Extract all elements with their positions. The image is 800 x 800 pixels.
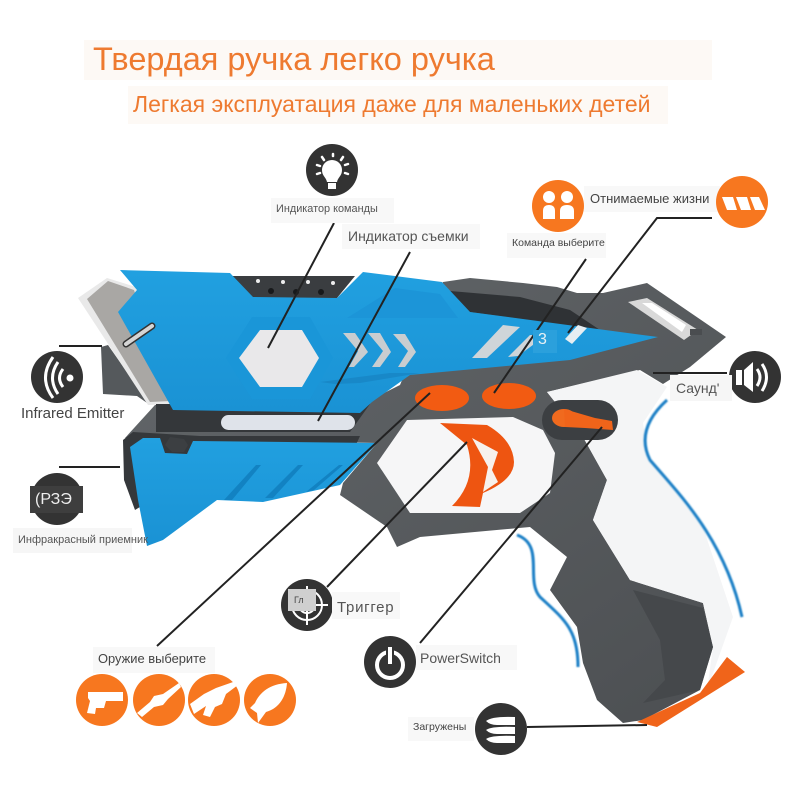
rail holes: [256, 279, 335, 285]
label: lives: Отнимаемые жизни: [590, 191, 709, 206]
icon: trigger target: Гл: [294, 595, 304, 605]
orange trigger: [440, 423, 514, 507]
label: loaded: [408, 717, 474, 741]
label: weapon select: [93, 647, 215, 673]
lower grooves: [224, 465, 343, 500]
icon: rifle: [133, 674, 185, 726]
label: sound: [670, 375, 732, 401]
label: shooting indicator: Индикатор съемки: [348, 228, 469, 244]
label: team select: Команда выберите: [512, 237, 605, 249]
display digit 3: 3: [538, 331, 547, 348]
icon: infrared receiver: [30, 473, 83, 525]
label: lives: [584, 186, 720, 212]
title: Твердая ручка легко ручка: [93, 41, 496, 77]
label: team select: [507, 233, 606, 258]
icon: infrared emitter: [31, 351, 83, 403]
icon: team indicator bulb: [306, 144, 358, 196]
gray frame: [125, 278, 726, 723]
rear dark emitter block: [101, 345, 150, 405]
shooting indicator: [221, 415, 355, 430]
icon: power: [364, 636, 416, 688]
white grip: [547, 370, 733, 690]
subtitle: Легкая эксплуатация даже для маленьких детей: [133, 91, 650, 117]
label: power switch: [416, 645, 517, 670]
label: trigger: Триггер: [337, 599, 394, 616]
label: team indicator: Индикатор команды: [276, 203, 378, 215]
icon: lives: [716, 176, 768, 228]
label: loaded: Загружены: [413, 721, 466, 733]
label: infrared emitter: Infrared Emitter: [21, 405, 124, 422]
icon: assault rifle: [188, 674, 240, 726]
label: weapon select: Оружие выберите: [98, 651, 206, 666]
icon: trigger target: [281, 579, 333, 631]
slanted stripes: [472, 325, 545, 358]
blue glow stripes: [517, 400, 742, 667]
label: power switch: PowerSwitch: [420, 650, 501, 666]
icon: pistol: [76, 674, 128, 726]
laser gun illustration: [78, 270, 745, 727]
dark front section: [123, 432, 360, 510]
rear silver plate: [78, 278, 178, 405]
display digit 3: [533, 330, 557, 353]
top rail dark: [230, 276, 355, 298]
label: shooting indicator: [342, 224, 480, 249]
icon: sound: [729, 351, 781, 403]
title: [84, 40, 712, 80]
orange magazine base: [637, 657, 745, 727]
icon: rocket: [244, 674, 296, 726]
trigger guard opening: [377, 417, 555, 513]
callout lines: [59, 218, 727, 727]
grip panel: [633, 590, 713, 703]
rear sight: [628, 298, 698, 340]
power switch: [542, 400, 618, 440]
icon: infrared receiver: (РЗЭ: [35, 491, 72, 508]
lower blue grip front: [130, 438, 377, 546]
icon: team select: [532, 180, 584, 232]
hexagon light: [226, 317, 333, 399]
subtitle: [128, 86, 668, 124]
slide pin: [126, 326, 152, 344]
label: infrared receiver: Инфракрасный приемник: [18, 534, 148, 546]
lives indicator: [565, 325, 587, 344]
label: infrared receiver: [13, 528, 148, 553]
label: trigger: [332, 592, 400, 619]
raised slide detail: [347, 288, 458, 318]
label: team indicator: [271, 198, 394, 223]
icon: bullets: [475, 703, 527, 755]
chevrons: [343, 333, 416, 367]
orange buttons: [415, 385, 469, 411]
upper blue slide: [118, 270, 658, 413]
label: sound: Саунд': [676, 380, 719, 396]
